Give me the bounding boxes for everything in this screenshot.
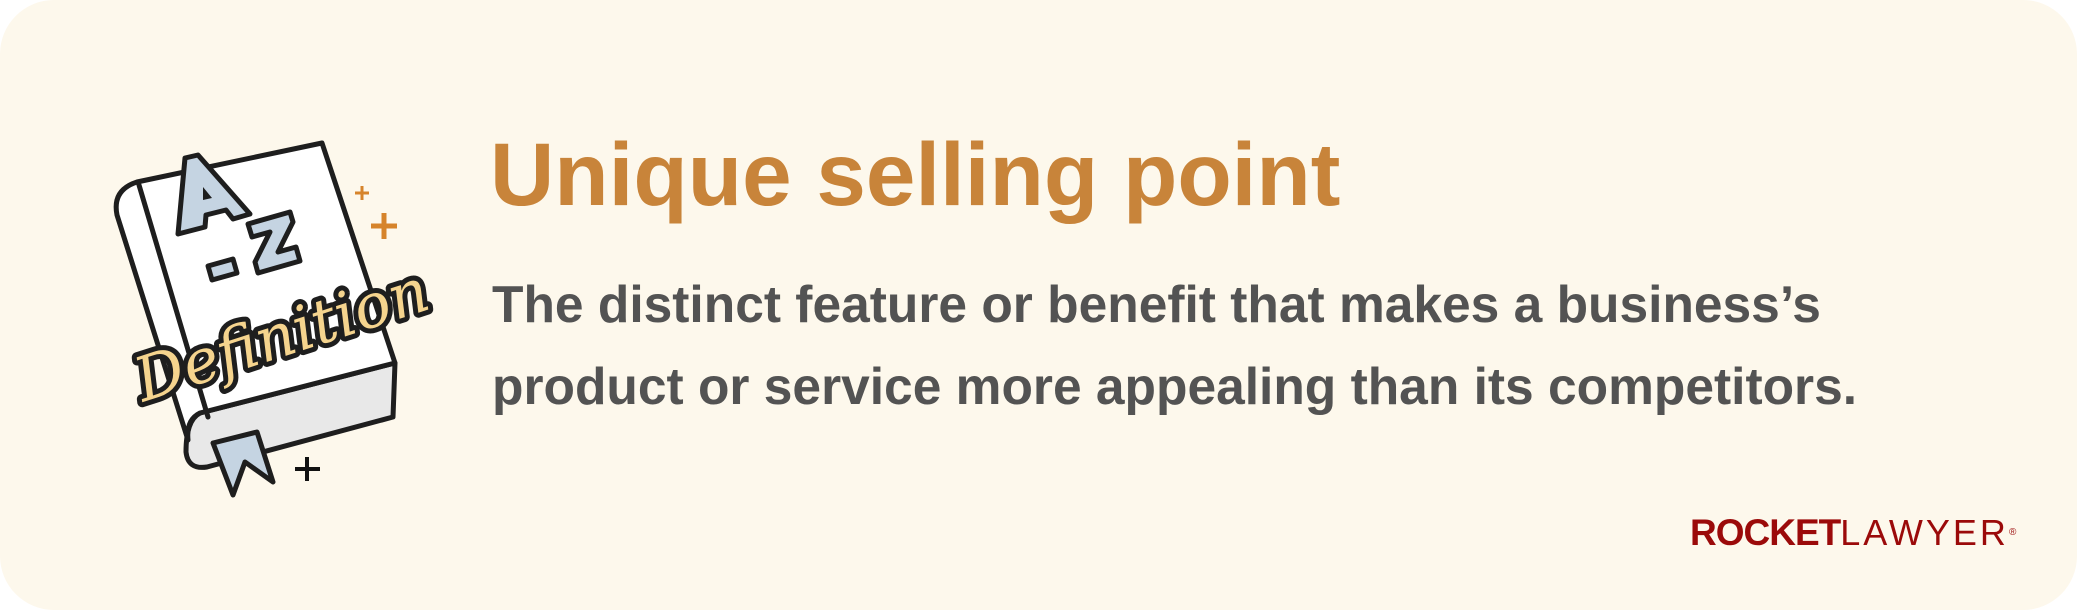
text block: definition	[492, 275, 1857, 415]
book cover	[116, 143, 395, 440]
page block	[186, 363, 395, 467]
logo: Rocket Lawyer: ROCKETLAWYER®	[1690, 512, 2016, 553]
title: Unique selling point	[490, 124, 1340, 224]
letters A-Z	[178, 155, 300, 280]
bookmark	[213, 432, 273, 495]
icon: definition book	[114, 140, 437, 498]
text block: definition: product or service more appealing than its competitors.	[492, 357, 1857, 415]
icon: sparkles	[295, 186, 397, 481]
text: Definition script: Definition	[125, 255, 437, 417]
text block: definition: The distinct feature or benefit that makes a business’s	[492, 275, 1821, 333]
